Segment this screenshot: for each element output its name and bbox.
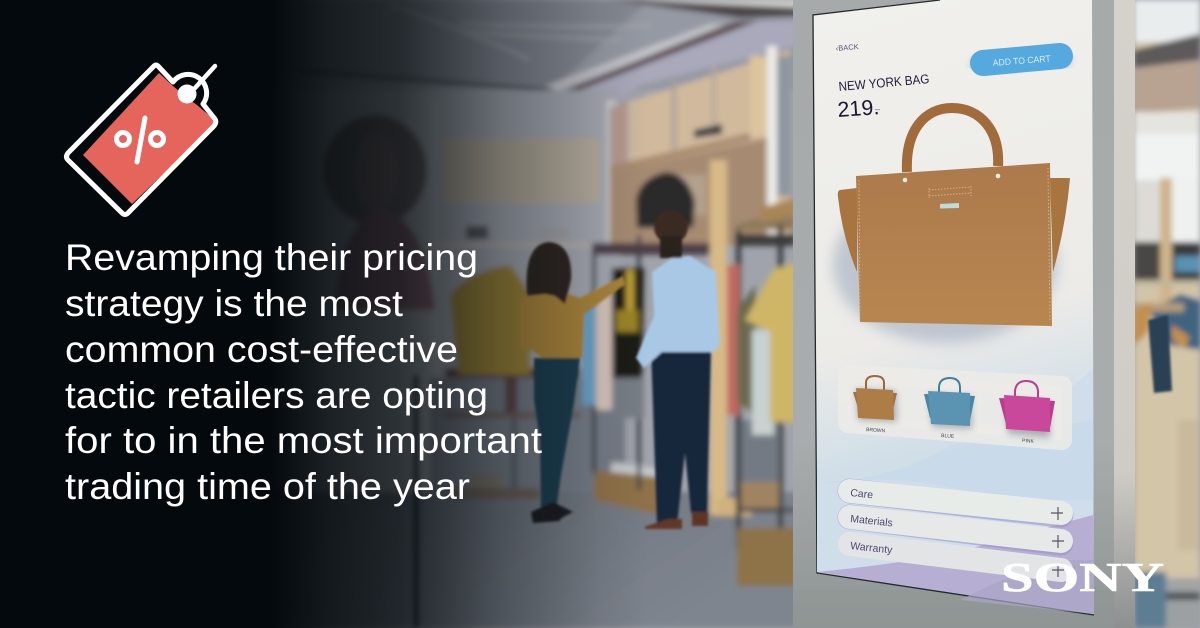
side gussets bbox=[838, 188, 857, 272]
pink option bbox=[999, 381, 1055, 445]
headline text bbox=[65, 236, 543, 507]
bag body bbox=[856, 163, 1052, 326]
headline text: strategy is the most bbox=[65, 282, 404, 324]
poster of a woman bbox=[323, 115, 427, 225]
logo: SONY: SONY bbox=[1001, 554, 1164, 600]
tag white outline bbox=[66, 65, 216, 214]
shoppers bbox=[520, 210, 720, 529]
wall corner column bbox=[432, 100, 437, 400]
right rack garments bbox=[727, 265, 739, 415]
label plate bbox=[940, 203, 959, 208]
handle bbox=[907, 108, 998, 172]
add to cart button: ADD TO CART bbox=[992, 53, 1051, 68]
foreground dark post bbox=[413, 375, 419, 628]
blue option bbox=[924, 378, 975, 440]
screen dark edge bbox=[813, 0, 1094, 615]
right of kiosk: ceiling and windows bbox=[1134, 0, 1200, 628]
left display table bbox=[445, 368, 580, 378]
brown option: BROWN bbox=[866, 427, 886, 434]
headline text: for to in the most important bbox=[65, 419, 543, 461]
main brown bag bbox=[833, 108, 1070, 343]
materials row: Materials bbox=[850, 513, 893, 529]
wall panel bbox=[442, 138, 600, 203]
back link: ‹BACK bbox=[835, 42, 859, 53]
pink option: PINK bbox=[1022, 438, 1035, 445]
colour options card bbox=[848, 375, 1062, 445]
care row: Care bbox=[850, 487, 874, 501]
upper wood shelving bbox=[610, 50, 790, 245]
warranty row: Warranty bbox=[850, 540, 894, 556]
accordion rows bbox=[850, 487, 1064, 577]
rack garments bbox=[582, 305, 596, 405]
jacket on mannequin bbox=[450, 265, 532, 375]
percent symbol bbox=[116, 118, 164, 162]
warranty row bbox=[850, 540, 1064, 577]
care row bbox=[850, 487, 1063, 520]
materials row bbox=[850, 513, 1064, 548]
hanging backpack bbox=[636, 172, 695, 228]
right garments bbox=[1150, 294, 1200, 352]
ceiling bbox=[270, 0, 800, 90]
floor bbox=[270, 492, 800, 628]
white pillar bbox=[606, 100, 616, 250]
central rack bbox=[594, 470, 668, 517]
blue option: BLUE bbox=[941, 433, 955, 440]
clothing tag bbox=[1148, 315, 1172, 393]
stitching patch bbox=[929, 186, 971, 198]
back wall bbox=[270, 90, 620, 490]
ceiling light strips bbox=[390, 5, 650, 60]
tag hole bbox=[178, 84, 196, 104]
brown option bbox=[853, 376, 897, 434]
digital signage kiosk bbox=[793, 0, 1135, 628]
wall shelf bbox=[430, 243, 615, 247]
kiosk frame bbox=[793, 0, 1115, 628]
kiosk side panel bbox=[1114, 0, 1135, 628]
tag red fill bbox=[83, 73, 217, 204]
man shopper bbox=[636, 210, 720, 529]
kiosk screen bbox=[813, 0, 1094, 615]
screen waves bbox=[817, 368, 1094, 614]
right rack bbox=[735, 234, 795, 246]
price: 219. bbox=[837, 95, 880, 122]
headline text: trading time of the year bbox=[65, 465, 470, 507]
headline text: Revamping their pricing bbox=[65, 236, 478, 278]
woman shopper bbox=[520, 242, 626, 523]
tag string bbox=[195, 66, 215, 88]
lower wall display area bbox=[430, 378, 625, 493]
headline text: tactic retailers are opting bbox=[65, 374, 488, 416]
product title: NEW YORK BAG bbox=[838, 71, 930, 94]
price: – bbox=[875, 104, 880, 114]
icon: price tag with percent bbox=[66, 65, 217, 214]
headline text: common cost-effective bbox=[65, 328, 458, 370]
wooden pillar bbox=[710, 160, 727, 515]
